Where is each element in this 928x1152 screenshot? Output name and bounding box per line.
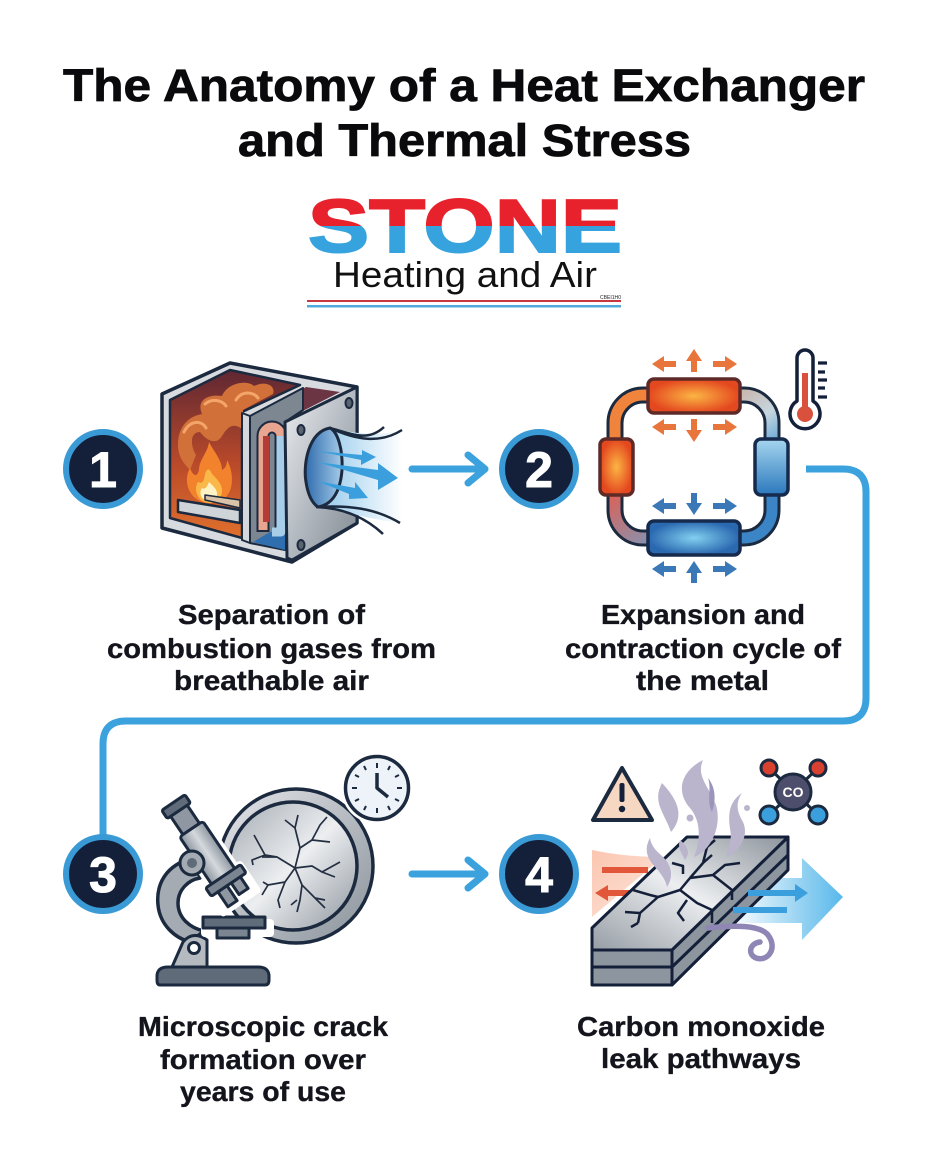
logo: Stone Heating and Air: Heating and Air bbox=[333, 254, 597, 295]
microscope knob bbox=[180, 851, 204, 875]
swirl bbox=[708, 926, 772, 959]
title: The Anatomy of a Heat Exchanger bbox=[63, 60, 865, 111]
cracks bbox=[625, 840, 740, 927]
caption: step 4: leak pathways bbox=[601, 1043, 801, 1074]
icon: heat exchanger cutaway bbox=[162, 363, 402, 562]
microscope tube bbox=[153, 789, 262, 918]
caption: step 3 bbox=[138, 1011, 388, 1107]
caption: step 2: the metal bbox=[636, 665, 769, 696]
title bbox=[63, 60, 865, 166]
microscope stage bbox=[203, 917, 270, 938]
cold right block bbox=[755, 439, 788, 495]
icon: microscope with cracked metal bbox=[153, 752, 413, 985]
badge 2: 2 bbox=[525, 442, 553, 498]
caption: step 2: Expansion and bbox=[601, 599, 805, 630]
caption: step 2 bbox=[565, 599, 842, 696]
caption: step 4: Carbon monoxide bbox=[577, 1011, 825, 1042]
title: and Thermal Stress bbox=[238, 115, 691, 166]
warning triangle bbox=[593, 768, 652, 820]
microscope arm bbox=[158, 858, 204, 942]
caption: step 4 bbox=[577, 1011, 825, 1074]
caption: step 3: years of use bbox=[180, 1076, 346, 1107]
arrow: step 1 to step 2 bbox=[412, 455, 485, 483]
contraction arrows bbox=[652, 493, 737, 583]
logo: Stone Heating and Air: STONE bbox=[308, 184, 622, 268]
caption: step 2: contraction cycle of bbox=[565, 633, 842, 664]
hot top block bbox=[648, 379, 740, 413]
icon: carbon monoxide leak bbox=[592, 760, 843, 985]
caption: step 1: combustion gases from bbox=[107, 633, 436, 664]
flow arrows bbox=[733, 884, 808, 913]
arrow: step 3 to step 4 bbox=[412, 860, 485, 888]
badge 4: 4 bbox=[525, 847, 553, 903]
connector line from step 2 to step 3 bbox=[103, 469, 866, 836]
pipe corners bbox=[615, 395, 772, 538]
logo: Stone Heating and Air: CBEI1H0 bbox=[600, 295, 621, 301]
cold bottom block bbox=[648, 521, 740, 555]
big outflow arrow bbox=[730, 858, 843, 940]
badge 3: 3 bbox=[89, 847, 117, 903]
caption: step 3: Microscopic crack bbox=[138, 1011, 388, 1042]
CO molecule bbox=[760, 760, 827, 824]
expansion arrows bbox=[652, 349, 737, 442]
caption: step 3: formation over bbox=[160, 1044, 366, 1075]
caption: step 1: breathable air bbox=[174, 665, 369, 696]
caption: step 1: Separation of bbox=[178, 599, 366, 630]
badge 4 bbox=[502, 837, 576, 911]
smoke wisps bbox=[647, 760, 750, 887]
heat region bbox=[592, 850, 663, 917]
badge 1: 1 bbox=[89, 442, 117, 498]
hot left block bbox=[600, 439, 633, 495]
magnified metal disc bbox=[219, 789, 373, 943]
badge 3 bbox=[66, 837, 140, 911]
thermometer bbox=[790, 350, 827, 429]
badge 2 bbox=[502, 432, 576, 506]
clock bbox=[341, 752, 413, 824]
microscope pillar bbox=[172, 935, 207, 967]
caption: step 1 bbox=[107, 599, 436, 696]
badge 1 bbox=[66, 432, 140, 506]
logo: Stone Heating and Air bbox=[307, 184, 622, 308]
microscope base bbox=[157, 967, 269, 985]
icon: expansion and contraction loop bbox=[600, 349, 827, 583]
slab bbox=[592, 837, 788, 985]
CO molecule: CO bbox=[782, 784, 804, 800]
